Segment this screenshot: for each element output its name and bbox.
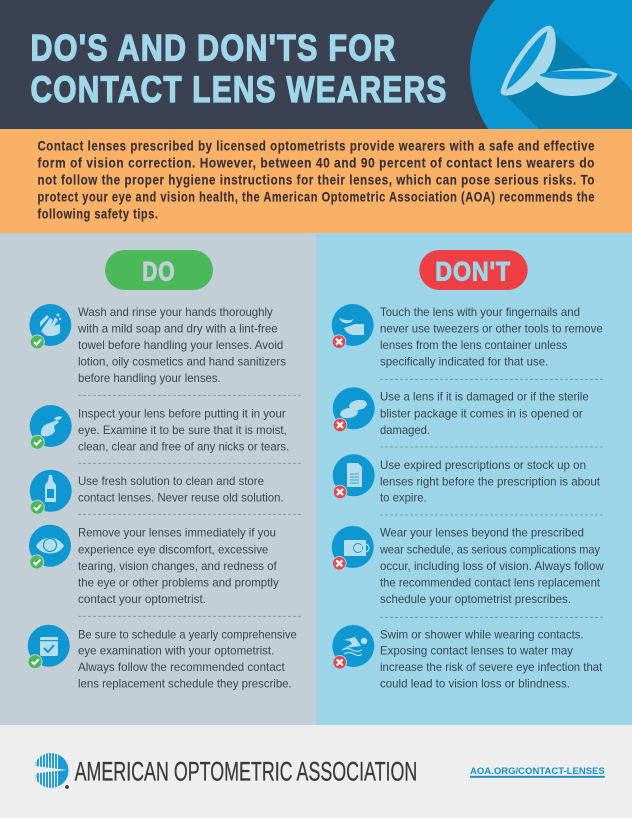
do item 3: fresh solution: Use fresh solution to clean and store [78,475,264,488]
intro panel: following safety tips. [38,206,158,222]
don't item 1: touch lens: never use tweezers or other tools to remove [380,322,603,336]
do item 2: inspect lens: eye. Examine it to be sure that it is moist, [78,424,287,437]
do item 3: fresh solution [30,470,284,514]
do item 1: wash hands [29,304,286,385]
don't item 4: wear beyond schedule: Wear your lenses beyond the prescribed [380,527,584,540]
don't heading pill [419,250,528,290]
icon: washing hands [29,304,71,349]
do item 4: remove lenses: the eye or other problems and promptly [78,577,279,590]
do item 5: yearly exam [28,625,297,691]
don't item 3: expired prescriptions: Use expired prescriptions or stock up on [380,459,586,472]
do item 5: yearly exam: lens replacement schedule they prescribe. [78,678,292,691]
do heading pill [105,250,213,290]
do item 1: wash hands: with a mild soap and dry with a lint-free [77,322,278,336]
don't item 4: wear beyond schedule: wear schedule, as serious complications may [379,543,600,556]
do heading pill: DO [142,256,175,286]
don't item 3: expired prescriptions [333,454,601,505]
don't item 3: expired prescriptions: to expire. [380,492,427,505]
icon: lens on finger [30,405,72,449]
do item 4: remove lenses: tearing, vision changes, and redness of [78,560,277,573]
don't item 4: wear beyond schedule: schedule your optometrist prescribes. [380,593,571,606]
do item 4: remove lenses [29,525,279,606]
do item 1: wash hands: Wash and rinse your hands thoroughly [78,306,273,319]
do item 3: fresh solution: contact lenses. Never reuse old solution. [78,492,284,505]
title: CONTACT LENS WEARERS [30,69,448,110]
panel: do [0,233,316,725]
footer [34,753,605,789]
do item 4: remove lenses: Remove your lenses immediately if you [78,527,276,540]
do item 2: inspect lens: clean, clear and free of any nicks or tears. [78,440,289,454]
don't item 2: damaged lens: damaged. [380,424,430,437]
header band [0,0,632,129]
do item 4: remove lenses: experience eye discomfort, excessive [78,543,268,556]
don't item 5: swim or shower: Swim or shower while wearing contacts. [380,628,584,641]
panel: don't [316,233,632,725]
don't item 4: wear beyond schedule: occur, including loss of vision. Always follow [380,560,604,573]
do item 4: remove lenses: contact your optometrist. [78,593,206,606]
intro panel [0,129,632,233]
website link: AOA.ORG/CONTACT-LENSES [470,766,605,777]
don't item 1: touch lens: specifically indicated for that use. [380,356,548,368]
don't item 1: touch lens [332,304,603,368]
icon: fingernail touching lens [332,304,374,349]
icon: irritated eye [29,525,71,569]
title: DO'S AND DON'TS FOR [30,28,396,68]
do item 1: wash hands: before handling your lenses. [78,372,221,385]
do item 1: wash hands: lotion, oily cosmetics and hand sanitizers [78,356,286,368]
icon: prescription paper [333,454,375,499]
title [30,28,448,110]
don't item 5: swim or shower [332,625,603,691]
icon: damaged lenses [333,387,375,432]
don't item 2: damaged lens: Use a lens if it is damaged or if the sterile [380,391,589,404]
icon: solution bottle [30,470,72,514]
don't item 4: wear beyond schedule: the recommended contact lens replacement [380,577,601,590]
don't item 5: swim or shower: could lead to vision loss or blindness. [380,678,570,691]
don't item 1: touch lens: lenses from the lens container unless [380,339,567,352]
do item 2: inspect lens [30,405,289,454]
do item 5: yearly exam: Be sure to schedule a yearly comprehensive [78,628,297,641]
organization name: AMERICAN OPTOMETRIC ASSOCIATION [75,757,417,787]
icon: calendar with eye [332,526,374,570]
icon: AOA logo [34,753,69,789]
don't heading pill: DON'T [435,256,511,286]
do item 5: yearly exam: eye examination with your optometrist. [78,645,274,658]
don't item 2: damaged lens [333,387,589,437]
do item 5: yearly exam: Always follow the recommended contact [78,661,285,674]
don't item 4: wear beyond schedule [332,526,604,606]
don't item 5: swim or shower: Exposing contact lenses to water may [380,645,573,658]
do item 1: wash hands: towel before handling your lenses. Avoid [78,339,283,352]
icon: swimmer [332,625,374,669]
do item 2: inspect lens: Inspect your lens before putting it in your [78,408,286,420]
don't item 3: expired prescriptions: lenses right before the prescription is about [380,475,601,488]
don't item 1: touch lens: Touch the lens with your fingernails and [380,306,580,319]
don't item 5: swim or shower: increase the risk of severe eye infection that [380,661,603,674]
icon: calendar with check [28,625,70,669]
icon: contact lenses in blue circle [470,0,632,129]
don't item 2: damaged lens: blister package it comes in is opened or [380,407,583,420]
